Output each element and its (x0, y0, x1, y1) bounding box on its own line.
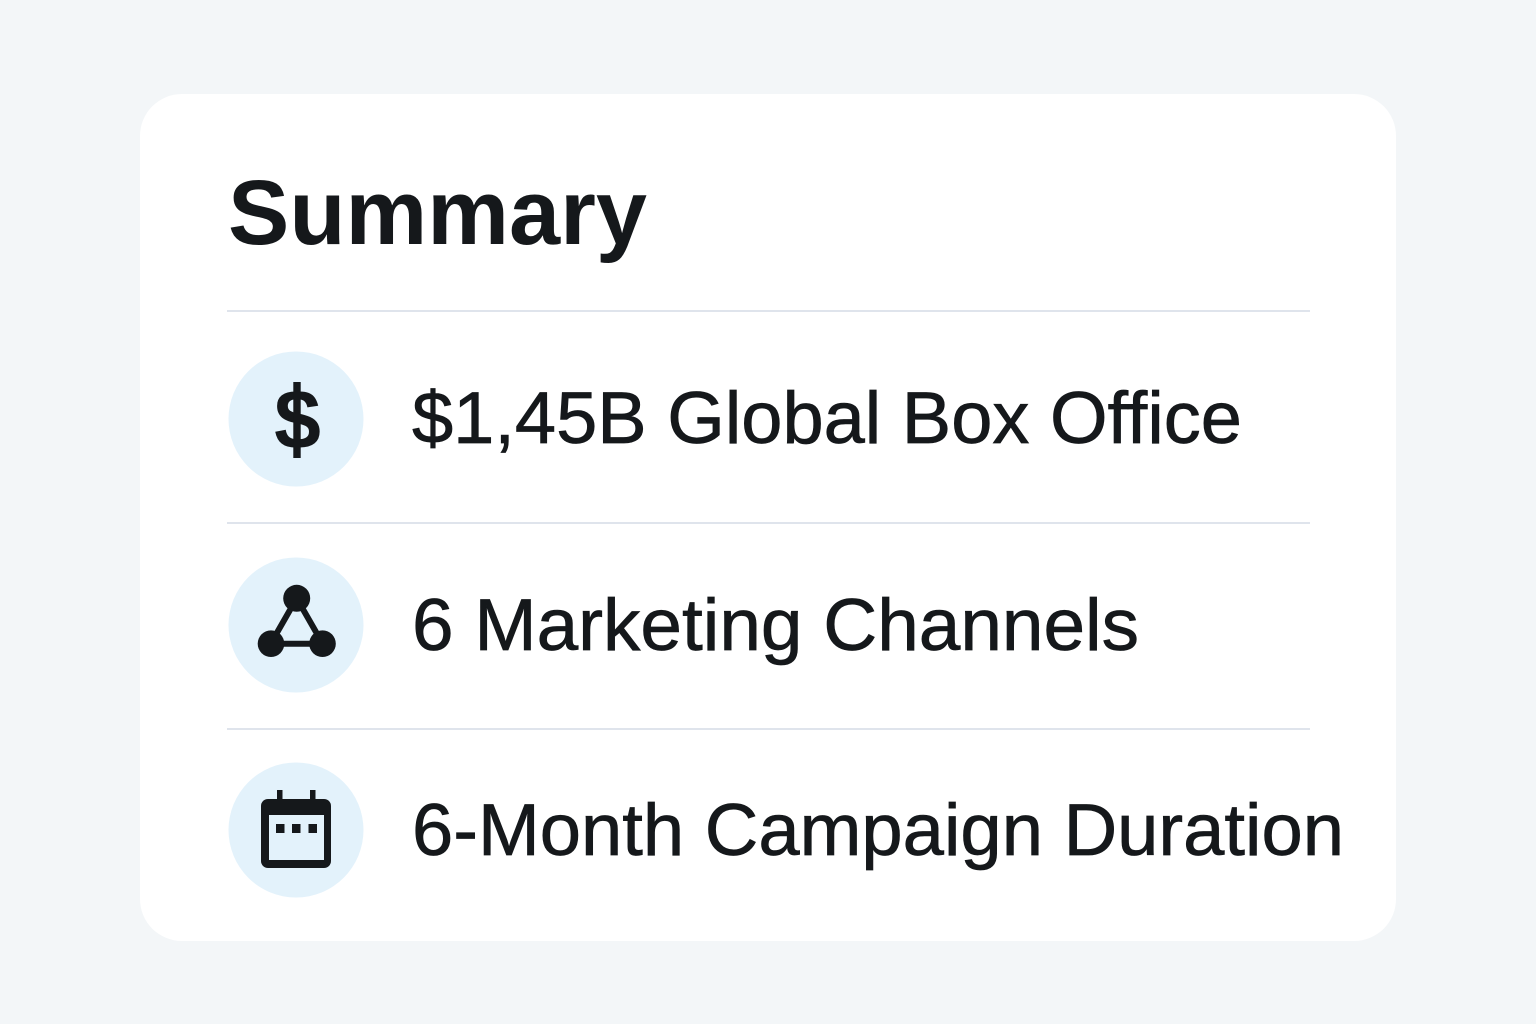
row: campaign duration (228, 762, 1344, 898)
text: box office: $1,45B Global Box Office (412, 378, 1242, 459)
text: marketing channels: 6 Marketing Channels (412, 585, 1139, 666)
title: Summary (228, 162, 647, 264)
icon: network triangle (228, 558, 364, 692)
icon: dollar sign: $ (274, 372, 321, 466)
icon: calendar (228, 762, 364, 898)
icon: dollar sign (228, 352, 364, 486)
panel: summary card (140, 94, 1396, 941)
row: marketing channels (228, 558, 1139, 692)
text: campaign duration: 6-Month Campaign Duration (412, 790, 1344, 871)
row: global box office (228, 352, 1242, 486)
